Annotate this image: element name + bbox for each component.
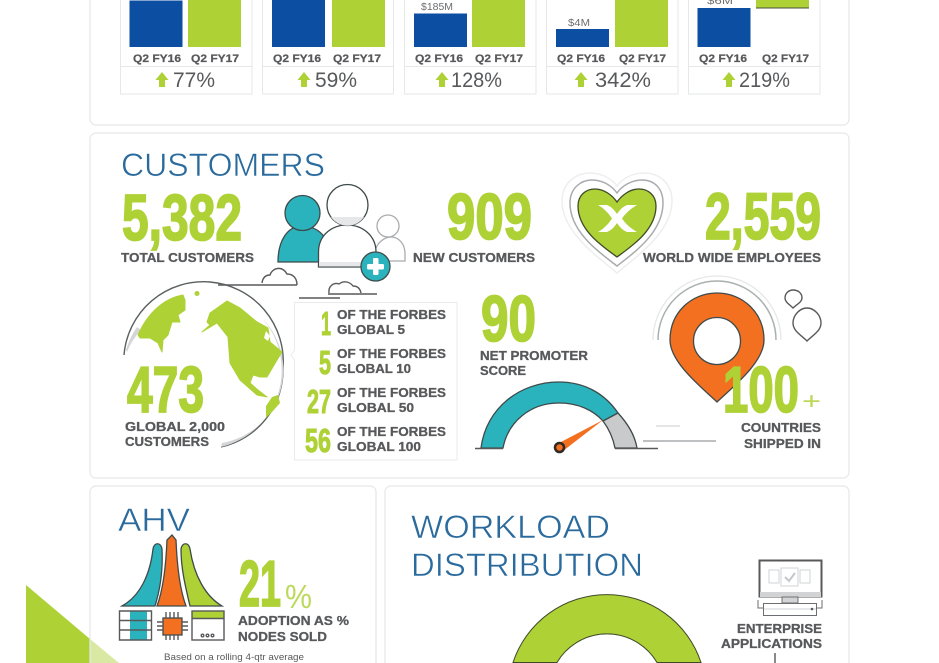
stat: AHV adoption: ADOPTION AS % <box>238 613 349 628</box>
icon: clouds and ground lines <box>218 268 377 298</box>
heading: AHV: AHV <box>118 502 191 538</box>
stat: forbes global 100 <box>305 422 446 459</box>
label: enterprise applications: ENTERPRISE <box>737 621 822 636</box>
card: 77 percent growth: 77% <box>173 69 215 92</box>
stat: global 2000 customers <box>125 353 225 449</box>
card: 342 percent growth: Q2 FY17 <box>619 53 666 65</box>
stat: global 2000 customers: GLOBAL 2,000 <box>125 419 225 434</box>
stat: countries shipped in: SHIPPED IN <box>744 436 821 451</box>
icon: AHV convergence <box>120 535 224 640</box>
card: 59 percent growth: Q2 FY16 <box>273 53 321 65</box>
icon: globe <box>124 282 283 447</box>
donut chart <box>513 595 701 662</box>
card: 77 percent growth <box>120 0 252 94</box>
label: enterprise applications: APPLICATIONS <box>721 636 822 651</box>
stat: forbes global 5: GLOBAL 5 <box>337 322 405 337</box>
card: 342 percent growth <box>546 0 678 94</box>
stat: new customers <box>413 180 535 265</box>
stat: world wide employees: WORLD WIDE EMPLOYEES <box>643 250 821 265</box>
stat: forbes global 50: GLOBAL 50 <box>337 400 414 415</box>
stat: countries shipped in: COUNTRIES <box>741 420 821 435</box>
card: 219 percent growth: 219% <box>739 69 790 92</box>
card: 219 percent growth <box>688 0 820 94</box>
stat: global 2000 customers: 473 <box>127 353 204 426</box>
stat: countries shipped in: + <box>802 388 821 415</box>
stat: countries shipped in <box>723 353 821 451</box>
card: 59 percent growth: 59% <box>315 69 357 92</box>
label: enterprise applications <box>721 621 822 663</box>
card: 342 percent growth: $4M <box>568 18 590 29</box>
card: 219 percent growth: Q2 FY17 <box>762 53 809 65</box>
card: 128 percent growth: Q2 FY16 <box>415 53 463 65</box>
panel: AHV <box>90 486 376 663</box>
card: 128 percent growth: $185M <box>421 2 453 13</box>
panel: forbes rankings <box>291 302 457 460</box>
background decorative green triangle <box>26 585 119 663</box>
card: 77 percent growth: Q2 FY16 <box>133 53 181 65</box>
gauge: net promoter <box>475 382 716 452</box>
panel: workload distribution <box>385 486 849 663</box>
heading: customers: CUSTOMERS <box>121 147 325 183</box>
stat: forbes global 10: OF THE FORBES <box>337 346 446 361</box>
stat: new customers: 909 <box>447 180 532 253</box>
stat: net promoter score: SCORE <box>480 363 526 378</box>
card: 77 percent growth: Q2 FY17 <box>191 53 239 65</box>
stat: net promoter score: 90 <box>481 282 536 355</box>
stat: forbes global 10: 5 <box>319 344 331 381</box>
icon: location pin <box>653 276 821 402</box>
stat: world wide employees <box>643 179 821 265</box>
icon: people with plus <box>278 184 405 281</box>
stat: AHV adoption: 21 <box>239 547 281 620</box>
stat: forbes global 10 <box>319 344 446 381</box>
stat: forbes global 5: 1 <box>321 305 331 342</box>
card: 59 percent growth <box>262 0 394 94</box>
panel: customers <box>90 133 849 478</box>
stat: forbes global 100: 56 <box>305 422 331 459</box>
stat: net promoter score: NET PROMOTER <box>480 348 589 363</box>
card: 128 percent growth: Q2 FY17 <box>475 53 523 65</box>
stat: global 2000 customers: CUSTOMERS <box>125 434 209 449</box>
stat: countries shipped in: 100 <box>723 353 799 426</box>
stat: forbes global 100: OF THE FORBES <box>337 424 446 439</box>
card: 342 percent growth: Q2 FY16 <box>557 53 605 65</box>
heading: workload distribution <box>411 509 643 583</box>
card: 59 percent growth: Q2 FY17 <box>333 53 381 65</box>
stat: forbes global 10: GLOBAL 10 <box>337 361 411 376</box>
stat: world wide employees: 2,559 <box>705 179 821 253</box>
icon: heart with X logo <box>562 173 672 273</box>
stat: forbes global 50: 27 <box>307 383 331 420</box>
panel: quarterly growth <box>90 0 849 125</box>
footnote: rolling average: Based on a rolling 4-qtr average <box>164 652 304 662</box>
stat: forbes global 5: OF THE FORBES <box>337 307 446 322</box>
heading: workload distribution: DISTRIBUTION <box>411 547 643 583</box>
stat: new customers: NEW CUSTOMERS <box>413 250 535 265</box>
stat: AHV adoption: % <box>285 578 312 615</box>
card: 128 percent growth <box>404 0 536 94</box>
card: 219 percent growth: Q2 FY16 <box>699 53 747 65</box>
stat: net promoter score <box>480 282 589 378</box>
heading: workload distribution: WORKLOAD <box>411 509 610 545</box>
stat: AHV adoption: NODES SOLD <box>238 629 327 644</box>
stat: forbes global 100: GLOBAL 100 <box>337 439 421 454</box>
stat: total customers: TOTAL CUSTOMERS <box>121 250 254 265</box>
card: 342 percent growth: 342% <box>595 69 651 92</box>
stat: forbes global 50: OF THE FORBES <box>337 385 446 400</box>
stat: AHV adoption <box>238 547 349 644</box>
stat: forbes global 50 <box>307 383 446 420</box>
stat: total customers: 5,382 <box>122 181 242 254</box>
icon: enterprise applications monitor <box>758 560 822 616</box>
stat: forbes global 5 <box>321 305 446 342</box>
card: 128 percent growth: 128% <box>451 69 502 92</box>
